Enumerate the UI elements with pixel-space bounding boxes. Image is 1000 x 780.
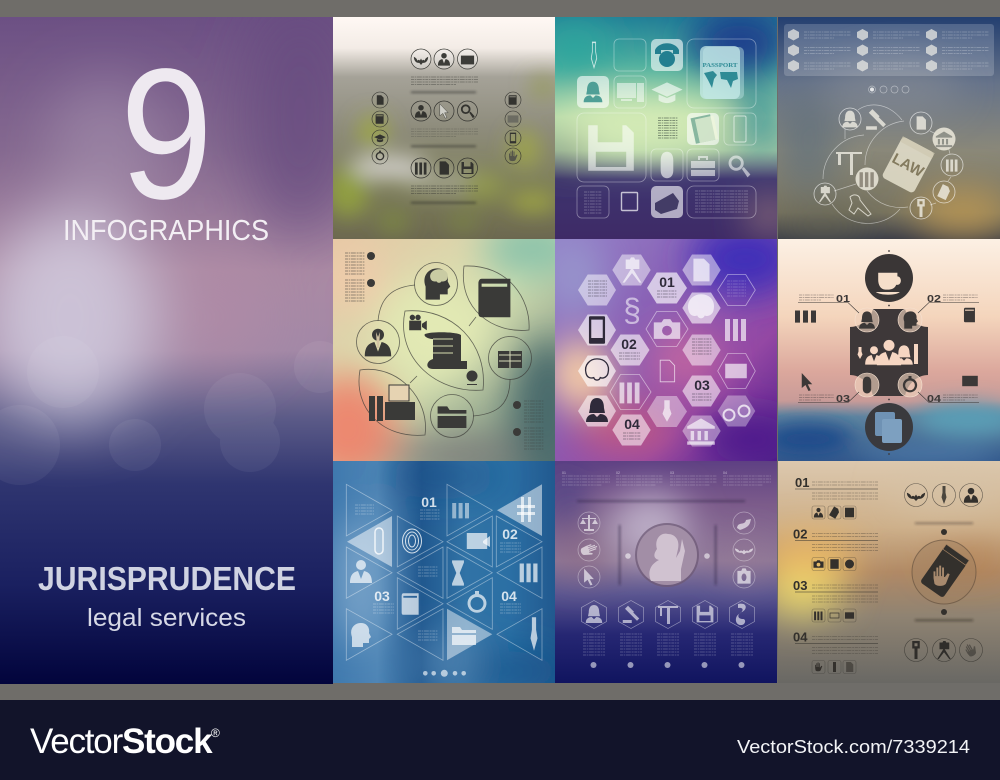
small dots [941,529,947,615]
page icon [660,360,675,382]
top-left text blocks [345,252,375,301]
numbers: 03 [694,377,710,393]
text block: center [658,118,678,138]
small dots beside medallion [625,553,710,559]
callout 04 [918,392,979,405]
text block: lower right [695,191,748,212]
callout 01 [798,294,859,313]
bottom hexagons [582,600,754,628]
icon: passport [700,46,744,99]
icon: graduation cap [651,82,683,103]
left icon column [578,512,600,588]
list item 03 [793,578,878,622]
filled hexagons [578,254,755,446]
list item 01: 01 [795,475,809,490]
icon: telephone [655,43,679,67]
icon: tablet [622,192,638,210]
handcuffs icon [724,406,750,420]
hexagon text [588,281,712,439]
text block 2 [411,129,478,136]
heading: infographics: INFOGRAPHICS [63,215,269,247]
filled network circles [856,128,956,190]
legend text [804,32,989,69]
header text columns: 01 [562,471,566,475]
outlined triangles [346,484,542,660]
network circles [814,108,963,219]
header text columns: 03 [670,471,674,475]
bottom dots [590,662,744,668]
callout 03 [798,392,859,405]
pager dots [868,86,909,93]
bottom pages circle [865,403,913,451]
top coffee circle [865,254,913,302]
footer image id: VectorStock.com/7339214 [737,737,970,757]
panel: cover [0,0,355,684]
connecting lines and leaves [356,262,532,438]
icon: floppy disk [588,125,634,171]
callout 03: 03 [836,394,851,405]
network icons [819,109,958,217]
middle icon row [411,101,478,121]
list item 02 [793,526,878,570]
header text columns: 02 [616,471,620,475]
right icon column [505,92,521,164]
panel: infographic 5 hexagons [545,221,800,464]
numbers: 04 [624,416,640,432]
bottom-right text blocks [513,401,544,449]
numbers: 03 [374,588,390,604]
icon: gold bar [655,193,679,214]
icon: computer [617,83,644,102]
left icon column [372,92,388,164]
list item 01 [795,475,878,519]
text block 3 [411,186,478,194]
icon: passport: PASSPORT [702,63,738,69]
outlined tiles [577,39,756,218]
icon: mobile phone [734,116,746,142]
outlined brain icon [586,359,608,380]
list item 04 [793,630,878,674]
right icon column [733,512,755,588]
icon details: brain, tablet rows, scroll lines [376,269,521,368]
legend hexagon icons [788,29,937,72]
numbers [621,274,710,432]
legend board [784,24,994,76]
diagram icons [365,268,522,428]
icon: chalk outline body [849,195,871,216]
side icons [795,308,978,391]
panel: infographic 9 numbered list [758,461,1000,683]
panel: infographic 6 central badge [763,239,1000,462]
numbers [374,494,518,604]
icon: lecturer [584,82,602,102]
dark icons [586,316,608,422]
filled tiles [577,39,719,218]
numbers: 02 [502,526,518,542]
icon: law book: LAW [889,150,927,181]
icon: note [691,114,718,144]
icon: paper clip [375,528,383,554]
panel: infographic 2 rounded tiles on teal blur [555,17,777,239]
big number 9: 9 [120,31,213,238]
header text columns [562,471,771,485]
bottom column text [583,634,753,655]
top circle icons [904,484,982,506]
registered mark: ® [211,726,220,740]
top icon row [411,49,478,69]
icon: mouse [661,152,673,178]
group of people [858,340,918,365]
numbers: 02 [621,336,637,352]
panel: infographic 4 leaves and circles [298,219,583,484]
bottom icon row [411,158,478,178]
fax page [389,385,409,401]
medallion [635,523,699,587]
icon: law book [881,136,935,194]
icon: pencil [591,42,597,68]
light icons [620,257,747,445]
numbers: 01 [659,274,675,290]
faint hexagon text [727,281,746,296]
text block: lower left [584,192,602,213]
callout 01: 01 [836,294,851,305]
outlined hexagons [610,274,755,410]
corner circles [855,308,922,397]
central book medallion [912,540,976,604]
panel: infographic 3 law network [773,17,1000,243]
small dots [888,250,890,455]
pager dots [423,670,466,677]
callout 02 [918,294,979,313]
title: jurisprudence: JURISPRUDENCE [38,560,296,597]
callout 04: 04 [927,394,942,405]
corner icons [859,311,918,393]
panel: infographic 7 triangles [332,461,563,691]
list item 03: 03 [793,578,807,593]
network arcs [823,105,951,223]
footer bar [0,700,1000,780]
numbers: 04 [501,588,517,604]
white icons [350,497,538,651]
icon: magnifier [729,156,750,177]
triangle text [355,505,521,640]
icon: fingerprint [402,529,422,553]
bottom hexagon icons [586,604,746,625]
bottom circle icons [904,638,982,662]
list item 02: 02 [793,526,807,542]
header text columns: 04 [723,471,727,475]
filled triangles [347,484,542,660]
callout 02: 02 [927,294,942,305]
section symbol: § [623,292,641,328]
shadow dividers [411,92,476,204]
text block 1 [411,77,478,84]
panel: infographic 8 medallion [545,461,777,683]
numbers: 01 [421,494,437,510]
panel: infographic 1 circles on green blur [328,17,557,239]
icon: briefcase [691,156,715,176]
shadow dividers [915,522,973,621]
list item 04: 04 [793,630,808,644]
subtitle: legal services: legal services [87,604,246,632]
shadow dividers [577,500,745,585]
central badge [850,309,928,396]
footer logo: VectorStock [30,722,213,761]
